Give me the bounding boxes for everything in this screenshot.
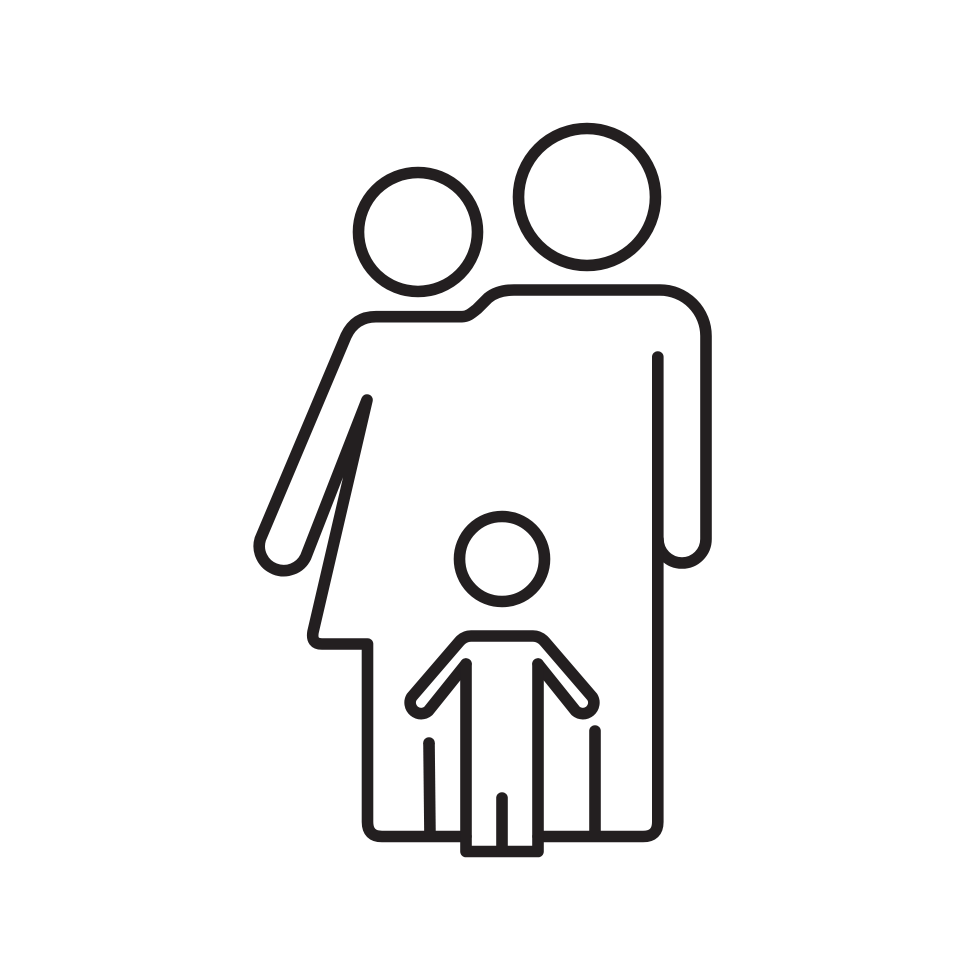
icon: adult left head <box>358 172 478 292</box>
icon: child legs <box>466 664 538 852</box>
icon: left adult leg line cap <box>423 737 435 749</box>
icon: right adult inner arm and side <box>538 357 658 836</box>
icon: right adult leg line <box>589 731 601 836</box>
icon: child leg divider <box>496 798 508 851</box>
icon: left adult leg line <box>429 743 430 836</box>
icon: adult right head <box>518 128 656 266</box>
icon: child arms and shoulders <box>410 636 594 714</box>
icon: adults body outline <box>259 290 706 836</box>
icon: child head <box>460 516 544 602</box>
